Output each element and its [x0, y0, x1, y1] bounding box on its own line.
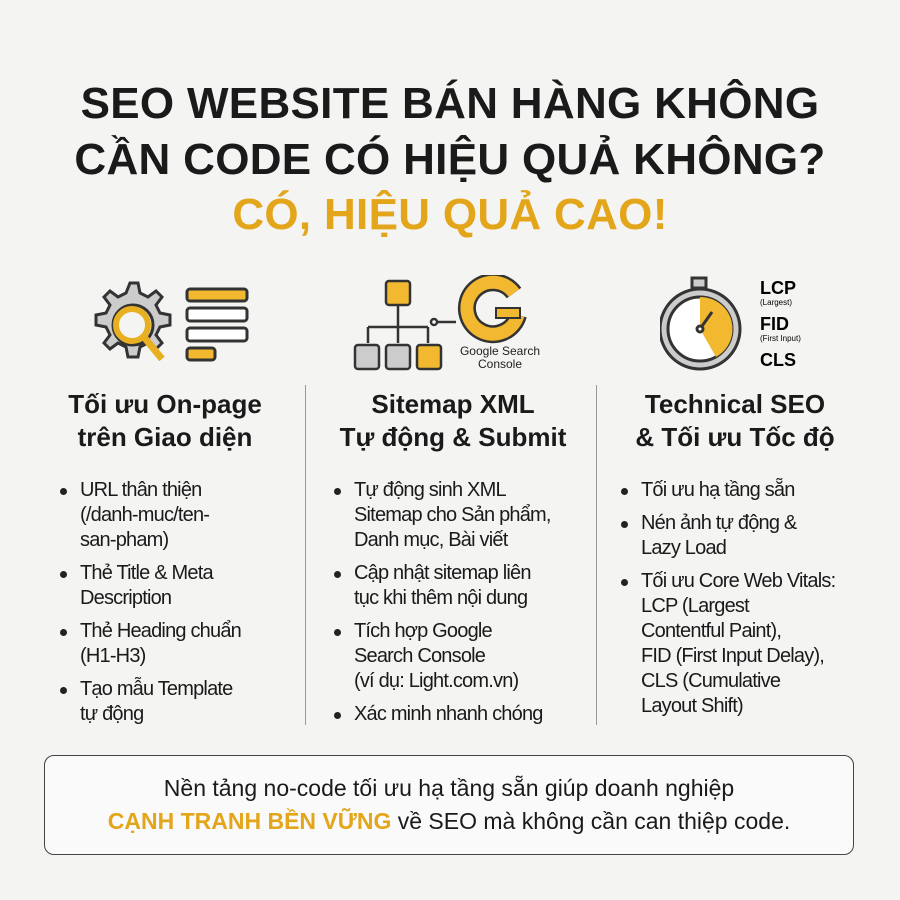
heading: Technical SEO	[645, 389, 825, 419]
bullets: san-pham)	[80, 529, 168, 551]
bullets: Lazy Load	[641, 537, 726, 559]
icon: stopwatch with metrics	[660, 276, 801, 370]
bullets: Tự động sinh XML	[354, 479, 506, 501]
bullets	[621, 478, 835, 717]
bullets: CLS (Cumulative	[641, 670, 780, 692]
heading	[340, 389, 566, 452]
bullets: Tối ưu hạ tầng sẵn	[641, 479, 795, 501]
subtitle: CÓ, HIỆU QUẢ CAO!	[232, 190, 668, 239]
heading: & Tối ưu Tốc độ	[635, 422, 835, 452]
icon: stopwatch with metrics: LCP	[760, 278, 796, 298]
icon: gear with magnifier and lines	[94, 282, 248, 362]
bullets: Search Console	[354, 645, 485, 667]
callout box: Nền tảng no-code tối ưu hạ tầng sẵn giúp doanh nghiệp	[164, 775, 734, 801]
bullets: Contentful Paint),	[641, 620, 781, 642]
icon: sitemap to google: Console	[478, 357, 522, 371]
bullets: (/danh-muc/ten-	[80, 504, 209, 526]
heading: Sitemap XML	[371, 389, 535, 419]
bullets: URL thân thiện	[80, 479, 201, 501]
bullets: Description	[80, 587, 171, 609]
title	[74, 79, 826, 184]
icon: stopwatch with metrics: (Largest)	[760, 298, 792, 307]
heading: Tối ưu On-page	[68, 389, 262, 419]
title: CẦN CODE CÓ HIỆU QUẢ KHÔNG?	[74, 135, 826, 184]
bullets: Cập nhật sitemap liên	[354, 562, 531, 584]
bullets	[334, 479, 551, 725]
bullets: Layout Shift)	[641, 695, 743, 717]
bullets: FID (First Input Delay),	[641, 645, 824, 667]
bullets: Xác minh nhanh chóng	[354, 703, 543, 725]
icon: stopwatch with metrics: CLS	[760, 350, 796, 370]
panel: technical	[621, 389, 835, 717]
bullets: Nén ảnh tự động &	[641, 512, 796, 534]
callout box	[44, 755, 854, 855]
bullets: (ví dụ: Light.com.vn)	[354, 670, 518, 692]
heading: trên Giao diện	[78, 422, 252, 452]
icon: sitemap to google: Google Search	[460, 344, 540, 358]
heading	[635, 389, 835, 452]
heading	[68, 389, 262, 452]
bullets: Sitemap cho Sản phẩm,	[354, 504, 551, 526]
icon: sitemap to google	[354, 275, 540, 371]
bullets: Tích hợp Google	[354, 620, 492, 642]
bullets: Tối ưu Core Web Vitals:	[641, 570, 835, 592]
panel: sitemap	[334, 389, 566, 725]
panel: on-page	[60, 389, 262, 725]
bullets: Tạo mẫu Template	[80, 678, 232, 700]
bullets: Danh mục, Bài viết	[354, 529, 507, 551]
title: SEO WEBSITE BÁN HÀNG KHÔNG	[81, 79, 819, 128]
heading: Tự động & Submit	[340, 422, 566, 452]
callout box: CẠNH TRANH BỀN VỮNG về SEO mà không cần can thiệp code.	[108, 808, 790, 834]
bullets: tự động	[80, 703, 143, 725]
bullets	[60, 479, 241, 725]
bullets: LCP (Largest	[641, 595, 749, 617]
bullets: (H1-H3)	[80, 645, 146, 667]
bullets: Thẻ Heading chuẩn	[80, 620, 241, 642]
icon: stopwatch with metrics: FID	[760, 314, 789, 334]
bullets: Thẻ Title & Meta	[80, 562, 213, 584]
icon: stopwatch with metrics: (First Input)	[760, 334, 801, 343]
bullets: tục khi thêm nội dung	[354, 587, 527, 609]
